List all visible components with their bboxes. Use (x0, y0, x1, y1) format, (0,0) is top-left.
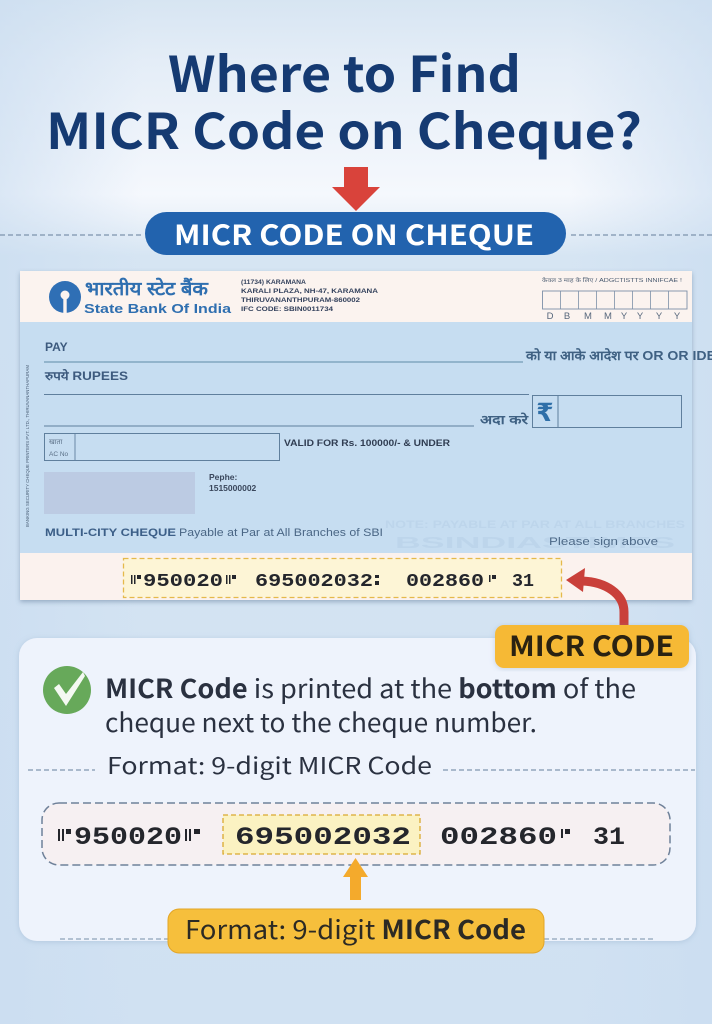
enlarged micr strip: 31 (593, 823, 625, 852)
amount box (532, 395, 682, 428)
enlarged micr strip: 002860 (440, 823, 557, 852)
format callout (60, 909, 655, 953)
account number box (44, 433, 280, 460)
side print text: BANKING SECURITY CHEQUE PRINTERS PVT. LTD., THIRUVANANTHAPURAM (25, 365, 31, 527)
panel: explanation (19, 638, 696, 953)
date boxes: B (564, 311, 570, 322)
icon: bank logo (49, 281, 81, 313)
arrow: red curved arrow (566, 568, 624, 627)
branch address: (11734) KARAMANA (241, 279, 306, 286)
pay line (44, 340, 712, 363)
date boxes (542, 277, 687, 322)
enlarged micr strip: 950020 (74, 823, 182, 852)
branch address: THIRUVANANTHPURAM-860002 (241, 297, 360, 304)
date boxes: M (604, 311, 612, 322)
multi-city line: Payable at Par at All Branches of SBI (179, 527, 383, 539)
cheque watermark (385, 519, 685, 552)
micr strip on cheque: 950020 (143, 572, 223, 592)
arrow: red down arrow (332, 167, 380, 211)
cheque footer band (20, 553, 692, 600)
pephe number (209, 472, 257, 493)
explanation text: cheque next to the cheque number. (105, 703, 537, 740)
section heading pill (0, 212, 712, 255)
signature note: Please sign above (549, 536, 658, 548)
micr strip on cheque: 695002032 (255, 572, 373, 592)
rupees line: अदा करे (480, 412, 529, 427)
bank name (84, 277, 232, 316)
explanation text (105, 669, 636, 740)
cheque watermark: BSINDIASTIMES (395, 535, 676, 552)
pay line: को या आके आदेश पर OR OR IDE (525, 348, 712, 363)
enlarged micr strip (42, 803, 670, 865)
title: MICR Code on Cheque? (46, 93, 642, 164)
date boxes: केवल 3 माह के लिए / ADGCTISTTS INNIFCAE ! (542, 277, 683, 284)
format callout: Format: 9-digit MICR Code (185, 910, 526, 947)
rupees line (44, 369, 529, 427)
date boxes: M (584, 311, 592, 322)
branch address: KARALI PLAZA, NH-47, KARAMANA (241, 288, 378, 295)
micr strip on cheque (124, 558, 562, 598)
date boxes: Y (656, 311, 663, 322)
bank name: State Bank Of India (84, 302, 232, 316)
panel: cheque (20, 271, 712, 600)
date boxes: D (547, 311, 554, 322)
multi-city line: MULTI-CITY CHEQUE (45, 527, 176, 539)
arrow: orange up arrow (343, 858, 368, 900)
pephe number: Pephe: (209, 472, 238, 482)
date boxes: Y (621, 311, 628, 322)
title: Where to Find (168, 36, 521, 107)
amount box: ₹ (536, 398, 554, 427)
multi-city line (45, 527, 383, 539)
micr code label: MICR CODE (509, 625, 674, 665)
account number box: खाता (49, 439, 63, 446)
micr strip on cheque: 002860 (406, 572, 484, 592)
account number box: AC No (49, 451, 69, 458)
branch address: IFC CODE: SBIN0011734 (241, 306, 333, 313)
bank name: भारतीय स्टेट बैंक (85, 277, 209, 300)
micr strip on cheque: 31 (512, 572, 534, 592)
format heading: Format: 9-digit MICR Code (107, 747, 432, 781)
rupees line: रुपये RUPEES (44, 369, 128, 383)
date boxes: Y (674, 311, 681, 322)
branch address (241, 279, 378, 313)
pay line: PAY (45, 340, 68, 354)
cheque header band (20, 271, 692, 322)
title (46, 36, 642, 164)
date boxes: Y (637, 311, 644, 322)
cheque watermark: NOTE: PAYABLE AT PAR AT ALL BRANCHES (385, 519, 685, 531)
enlarged micr strip: 695002032 (235, 823, 411, 852)
section heading pill: MICR CODE ON CHEQUE (174, 214, 534, 254)
pephe number: 1515000002 (209, 483, 257, 493)
validity text: VALID FOR Rs. 100000/- & UNDER (284, 438, 450, 449)
grey box (44, 472, 195, 514)
icon: green check (43, 666, 91, 714)
explanation text: MICR Code is printed at the bottom of the (105, 669, 636, 706)
